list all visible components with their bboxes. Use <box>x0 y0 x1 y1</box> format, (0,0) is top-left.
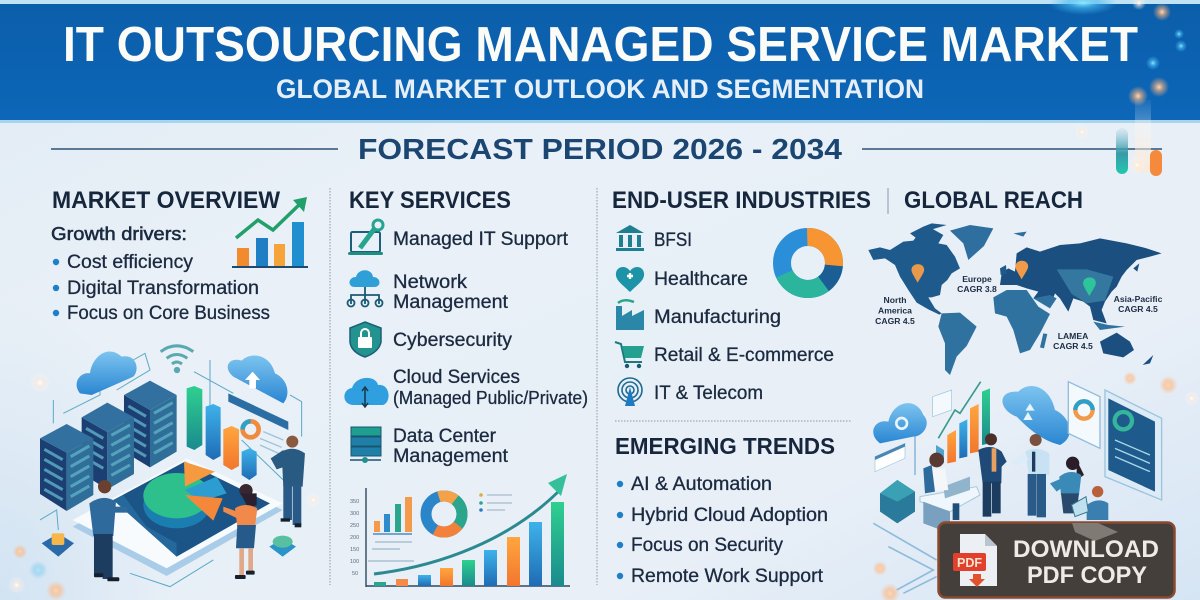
title: IT OUTSOURCING MANAGED SERVICE MARKET <box>63 18 1138 72</box>
map label: north america: North <box>884 295 906 305</box>
3D bars <box>187 386 257 480</box>
icon: manufacturing factory <box>616 300 644 330</box>
map label: europe <box>957 274 997 294</box>
heading: global reach: GLOBAL REACH <box>904 187 1083 214</box>
text: IT and telecom: IT & Telecom <box>654 383 763 404</box>
floor rails <box>873 523 937 593</box>
text: BFSI: BFSI <box>654 230 692 251</box>
map pin: asia-pacific <box>1083 277 1096 296</box>
desk worker and server stack <box>880 453 980 533</box>
bars <box>374 582 386 586</box>
server racks <box>40 381 177 511</box>
sparkles <box>873 372 1199 600</box>
button label: PDF COPY <box>1027 562 1147 589</box>
pie chart on platform <box>143 462 227 528</box>
icon: growth bar chart <box>232 197 308 267</box>
text: managed IT support: Managed IT Support <box>393 229 569 250</box>
chart: market growth: 250 <box>350 523 359 529</box>
map label: north america: CAGR 4.5 <box>875 316 915 326</box>
text: network management <box>393 272 509 313</box>
chart: market growth: 50 <box>352 571 358 577</box>
heading: market overview: MARKET OVERVIEW <box>52 187 280 214</box>
growth drivers list: Focus on Core Business <box>67 303 270 324</box>
chart: market growth: 350 <box>350 499 359 505</box>
map label: north america: America <box>878 306 912 316</box>
emerging trends list: Focus on Security <box>631 535 783 556</box>
icon: data center <box>350 427 381 463</box>
sparkles <box>8 373 321 600</box>
bars and trend arrow <box>933 382 990 463</box>
connector lines <box>40 353 302 587</box>
text: cybersecurity: Cybersecurity <box>393 330 512 351</box>
download PDF button <box>938 522 1174 598</box>
icon: managed IT support <box>348 220 383 255</box>
icon: retail cart <box>615 342 644 368</box>
report panels <box>1068 382 1162 500</box>
map label: LAMEA: CAGR 4.5 <box>1053 341 1093 351</box>
header banner <box>0 0 1200 123</box>
text: network management: Management <box>393 292 509 313</box>
panel: market overview <box>8 187 321 600</box>
chart: market growth: 300 <box>350 511 359 517</box>
chart: industry donut <box>772 227 844 299</box>
chart: market growth: 100 <box>350 559 359 565</box>
two men shaking hands <box>978 433 1049 517</box>
map label: north america <box>875 295 915 326</box>
growth drivers list: Digital Transformation <box>67 278 259 299</box>
icon: PDF file <box>953 534 997 587</box>
woman and seated colleague <box>1050 457 1108 520</box>
world map <box>868 223 1162 375</box>
donut <box>419 489 469 539</box>
person: woman <box>223 484 257 579</box>
map label: asia-pacific <box>1114 294 1163 314</box>
section dividers <box>330 188 888 585</box>
illustration: data center and analysts <box>8 346 321 600</box>
heading: end-user industries: END-USER INDUSTRIES <box>612 187 871 214</box>
chart: market growth <box>350 474 570 587</box>
chart: market growth: 150 <box>350 547 359 553</box>
platform <box>73 458 283 576</box>
panel: key services <box>344 187 588 587</box>
heading: emerging trends: EMERGING TRENDS <box>615 433 835 459</box>
subtitle: GLOBAL MARKET OUTLOOK AND SEGMENTATION <box>276 74 924 104</box>
button label: DOWNLOAD <box>1013 536 1159 563</box>
growth drivers list: Cost efficiency <box>67 252 194 273</box>
text: healthcare: Healthcare <box>654 269 748 290</box>
text: retail and e-commerce: Retail & E-commerce <box>654 345 834 366</box>
clouds <box>77 352 288 430</box>
map label: europe: CAGR 3.8 <box>957 284 997 294</box>
person: man with tablet <box>271 436 305 527</box>
map label: LAMEA <box>1053 331 1093 351</box>
map label: europe: Europe <box>962 274 992 284</box>
text: cloud services: (Managed Public/Private) <box>393 388 588 408</box>
map label: asia-pacific: CAGR 4.5 <box>1118 304 1158 314</box>
button label <box>1013 536 1159 589</box>
text: data center management: Management <box>393 446 509 467</box>
base nodes <box>42 533 296 557</box>
text: cloud services <box>393 367 588 408</box>
icon: wifi signal <box>161 346 193 372</box>
emerging trends list: AI & Automation <box>631 474 772 495</box>
icon: telecom tower <box>618 378 642 406</box>
forecast period heading: FORECAST PERIOD 2026 - 2034 <box>358 134 842 166</box>
map label: asia-pacific: Asia-Pacific <box>1114 294 1163 304</box>
heading: key services: KEY SERVICES <box>349 187 511 214</box>
icon: BFSI bank <box>616 225 644 251</box>
chart: market growth: 200 <box>350 535 359 541</box>
icon: PDF file: PDF <box>957 556 982 570</box>
panel: global reach <box>868 187 1199 600</box>
icon: cybersecurity shield <box>350 322 381 357</box>
emerging trends list: Hybrid Cloud Adoption <box>631 505 828 526</box>
growth drivers list <box>51 224 270 324</box>
emerging trends list <box>617 474 828 587</box>
icon: cloud services <box>344 378 389 407</box>
text: data center management: Data Center <box>393 426 497 447</box>
text: data center management <box>393 426 509 467</box>
icon: network management <box>348 270 382 306</box>
person: man foreground <box>89 480 127 581</box>
map pin: north america <box>911 264 924 283</box>
decorative light columns <box>1075 100 1162 176</box>
panel: end-user industries <box>612 187 871 587</box>
emerging trends list: Remote Work Support <box>631 566 824 587</box>
map pin: europe <box>1015 261 1028 279</box>
text: network management: Network <box>393 272 468 293</box>
illustration: business team <box>873 372 1199 600</box>
mini donut and report lines <box>243 421 283 454</box>
text: cloud services: Cloud Services <box>393 367 520 388</box>
central cloud <box>1002 386 1070 445</box>
text: manufacturing: Manufacturing <box>654 307 781 328</box>
icon: healthcare heart <box>616 267 644 292</box>
cloud with gear <box>873 403 927 475</box>
map label: LAMEA: LAMEA <box>1058 331 1088 341</box>
growth drivers list: Growth drivers: <box>51 224 187 244</box>
